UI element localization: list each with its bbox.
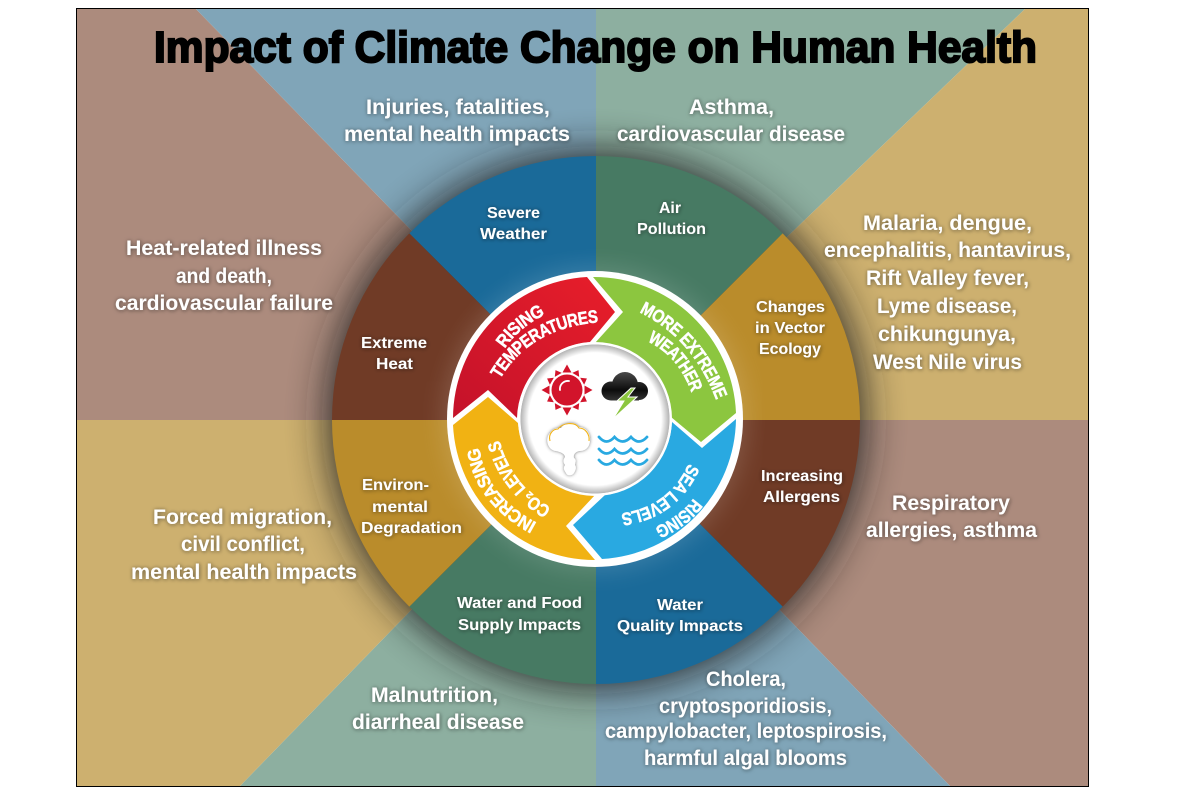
text: vector diseases: encephalitis, hantavirus,	[824, 239, 1071, 262]
label: increasing allergens: Increasing	[761, 468, 843, 485]
icon: sun	[542, 364, 592, 416]
text: vector diseases: Lyme disease,	[877, 295, 1017, 318]
text: vector diseases	[824, 212, 1071, 374]
wedge: water and food supply impacts	[410, 524, 596, 684]
label: water and food supply impacts: Water and Food	[457, 595, 582, 612]
label: changes in vector ecology: in Vector	[755, 320, 825, 337]
text: vector diseases: chikungunya,	[878, 323, 1016, 346]
text: cholera: Cholera,	[706, 668, 786, 691]
text: malnutrition: Malnutrition,	[371, 684, 498, 707]
text: cholera: cryptosporidiosis,	[659, 695, 832, 718]
text: forced migration: civil conflict,	[181, 533, 305, 556]
text: respiratory: Respiratory	[892, 492, 1010, 515]
text: asthma cardiovascular: cardiovascular disease	[617, 123, 845, 146]
text: malnutrition: diarrheal disease	[352, 711, 524, 734]
panel: water and food outcomes	[240, 609, 596, 786]
label: increasing allergens: Allergens	[763, 489, 840, 506]
wedge: severe weather	[410, 156, 596, 314]
text: respiratory	[866, 492, 1037, 542]
panel: air pollution outcomes	[596, 9, 1025, 242]
text: vector diseases: Malaria, dengue,	[863, 212, 1032, 235]
panel: environmental degradation outcomes	[77, 420, 422, 786]
text: cholera: harmful algal blooms	[644, 747, 847, 770]
label: air pollution: Air	[659, 200, 681, 217]
arrow: more extreme weather: WEATHER	[649, 330, 702, 393]
label: water and food supply impacts: Supply Impacts	[458, 617, 581, 634]
label: extreme heat: Extreme	[361, 335, 427, 352]
title: Impact of Climate Change on Human Health	[154, 23, 1037, 72]
label: environmental degradation: Environ-	[362, 477, 429, 494]
text: vector diseases: Rift Valley fever,	[866, 267, 1029, 290]
arrow: rising sea levels: RISING	[656, 498, 703, 538]
ring highlight	[443, 267, 747, 571]
arrow: rising sea levels	[573, 419, 736, 559]
panel: allergens outcomes	[772, 420, 1088, 786]
wedge: water quality impacts	[596, 524, 782, 684]
label: environmental degradation: mental	[372, 499, 428, 516]
panel: extreme heat outcomes	[77, 9, 420, 420]
arrow: rising temperatures: TEMPERATURES	[489, 310, 598, 376]
text: respiratory: allergies, asthma	[866, 519, 1037, 542]
text: cholera: campylobacter, leptospirosis,	[605, 720, 887, 743]
text: forced migration	[131, 506, 357, 584]
text: injuries: mental health impacts	[344, 123, 570, 146]
label: water quality impacts: Water	[657, 597, 703, 614]
arrow: increasing CO2 levels: INCREASING	[468, 448, 536, 534]
wedge: increasing allergens	[700, 420, 860, 606]
arrow: rising temperatures	[453, 277, 615, 418]
text: asthma cardiovascular	[617, 96, 845, 146]
text: vector diseases: West Nile virus	[873, 351, 1022, 374]
icon: mushroom cloud	[547, 423, 590, 475]
icon: waves	[599, 437, 647, 464]
panel: water quality outcomes	[596, 610, 950, 786]
arrow: rising sea levels: SEA LEVELS	[622, 464, 699, 526]
label: extreme heat	[361, 335, 427, 373]
wheel labels	[361, 200, 843, 635]
text: heat illness: Heat-related illness	[126, 237, 322, 260]
arrow: increasing CO2 levels: CO₂ LEVELS	[488, 441, 549, 517]
text: forced migration: Forced migration,	[153, 506, 332, 529]
wedge: changes in vector ecology	[700, 233, 860, 420]
icon: storm cloud	[602, 372, 648, 419]
label: air pollution	[637, 200, 706, 238]
text: malnutrition	[352, 684, 524, 734]
text: heat illness: and death,	[176, 265, 272, 288]
label: environmental degradation: Degradation	[361, 520, 462, 537]
text: forced migration: mental health impacts	[131, 561, 357, 584]
label: changes in vector ecology	[755, 299, 825, 358]
label: water quality impacts: Quality Impacts	[617, 618, 743, 635]
label: water quality impacts	[617, 597, 743, 635]
label: severe weather: Severe	[487, 205, 540, 222]
arrow: increasing CO2 levels	[453, 397, 595, 560]
outer wheel	[326, 150, 866, 690]
text: cholera	[605, 668, 887, 770]
outcome texts	[115, 96, 1071, 770]
label: changes in vector ecology: Changes	[756, 299, 825, 316]
text: injuries: Injuries, fatalities,	[366, 96, 550, 119]
label: severe weather	[480, 205, 547, 243]
label: severe weather: Weather	[480, 226, 547, 243]
wedge: air pollution	[596, 156, 782, 316]
text: asthma cardiovascular: Asthma,	[689, 96, 774, 119]
label: extreme heat: Heat	[376, 356, 414, 373]
label: changes in vector ecology: Ecology	[759, 341, 821, 358]
wheel shadow	[328, 152, 864, 688]
wedge: extreme heat	[332, 234, 490, 420]
center disc	[518, 342, 672, 496]
panel: severe weather outcomes	[196, 9, 596, 231]
wedge: environmental degradation	[332, 420, 492, 606]
text: injuries	[344, 96, 570, 146]
arrow: more extreme weather: MORE EXTREME	[640, 301, 728, 400]
label: air pollution: Pollution	[637, 221, 706, 238]
label: water and food supply impacts	[457, 595, 582, 634]
label: environmental degradation	[361, 477, 462, 537]
text: heat illness: cardiovascular failure	[115, 292, 333, 315]
panel: vector ecology outcomes	[786, 9, 1088, 420]
arrow: more extreme weather	[593, 277, 736, 442]
text: heat illness	[115, 237, 333, 315]
label: increasing allergens	[761, 468, 843, 506]
inner ring base	[447, 271, 743, 567]
arrow: rising temperatures: RISING	[495, 305, 544, 348]
